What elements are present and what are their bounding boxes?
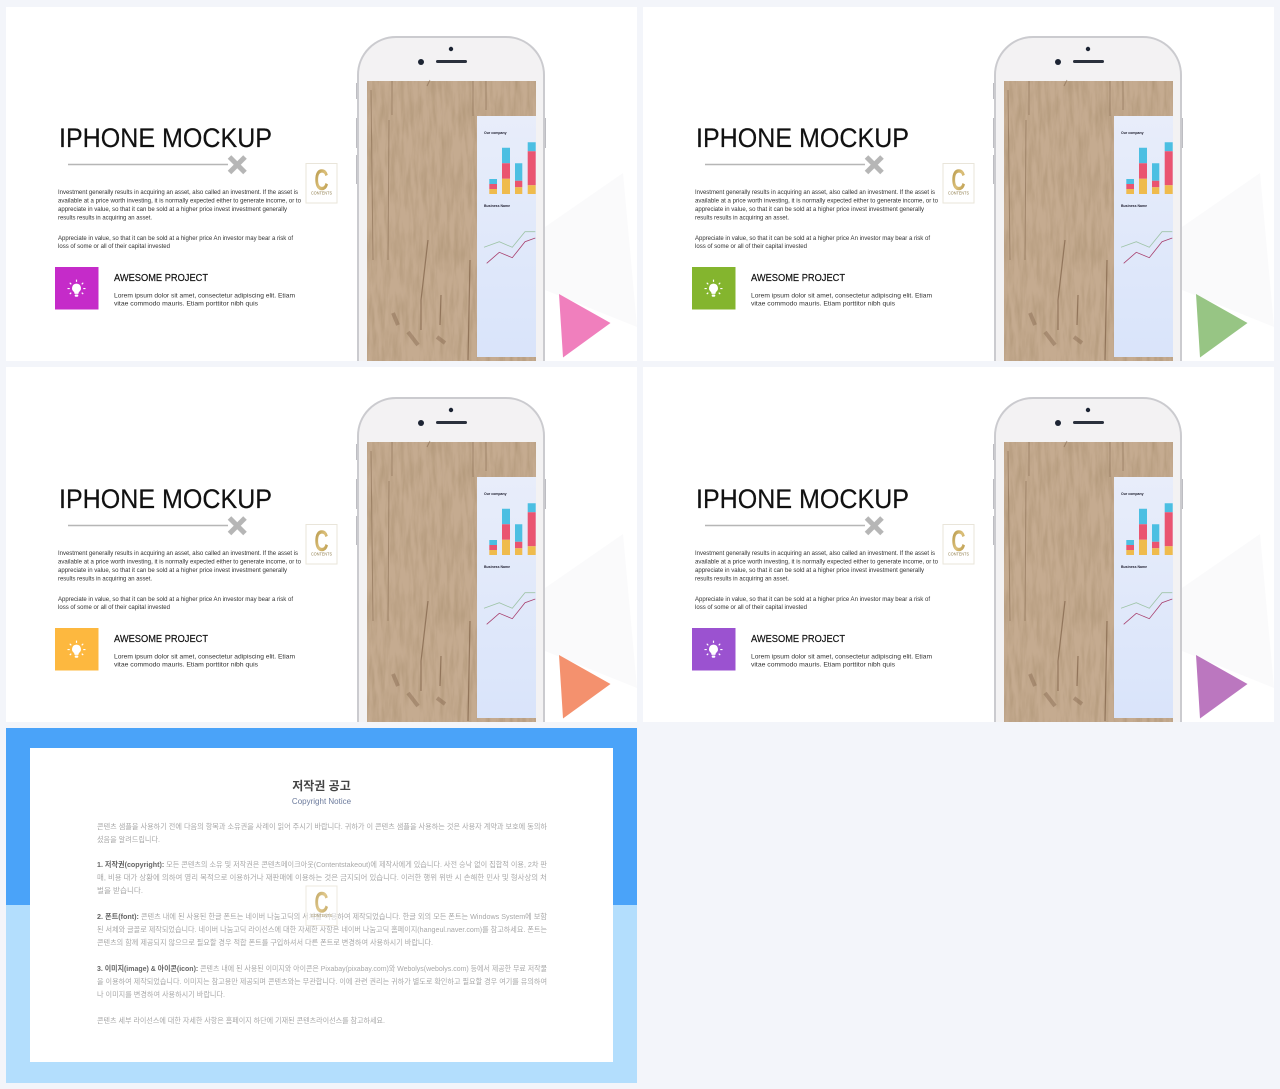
icon: light bulb tile <box>692 628 736 670</box>
project description: vitae commodo mauris. Etiam porttitor nibh quis <box>751 662 895 668</box>
project description: vitae commodo mauris. Etiam porttitor nibh quis <box>114 300 258 308</box>
title: IPHONE MOCKUP <box>696 484 909 514</box>
body paragraphs: Appreciate in value, so that it can be sold at a higher price An investor may bear a risk of <box>695 235 930 242</box>
section 3: image and icon: 3. 이미지(image) & 아이콘(icon): 콘텐츠 내에 된 사용된 이미지와 아이콘은 Pixabay(pixabay.com)와 Webolys(webolys.com) 등에서 제공한 무료 저작물 <box>97 963 547 973</box>
logo badge: C <box>952 525 966 558</box>
body paragraphs <box>695 550 939 611</box>
document with charts: Business Name <box>1121 565 1147 569</box>
logo badge: C <box>952 164 966 197</box>
logo badge: C <box>314 525 328 558</box>
body paragraphs: appreciate in value, so that it can be sold at a higher price invest investment generally <box>58 567 288 574</box>
title: IPHONE MOCKUP <box>59 123 272 153</box>
pale background triangle <box>1182 534 1274 688</box>
title rule with cross <box>68 157 245 172</box>
slide 1: magenta <box>6 7 637 370</box>
section 1: copyright <box>97 859 547 895</box>
project description: vitae commodo mauris. Etiam porttitor nibh quis <box>751 300 895 308</box>
body paragraphs: Investment generally results in acquiring an asset, also called an investment. If the asset is <box>58 550 298 557</box>
body paragraphs: loss of some or all of their capital invested <box>58 243 171 250</box>
body paragraphs: results results in acquiring an asset. <box>695 576 789 582</box>
document with charts: Business Name <box>484 565 510 569</box>
document with charts <box>477 477 536 718</box>
body paragraphs: available at a price worth investing, it is normally expected either to generate income, or to <box>695 558 939 566</box>
title rule with cross <box>705 518 882 534</box>
phone mockup <box>993 398 1183 731</box>
body paragraphs: appreciate in value, so that it can be sold at a higher price invest investment generally <box>695 567 925 574</box>
title: IPHONE MOCKUP <box>696 123 909 153</box>
document with charts <box>1114 477 1173 718</box>
project heading: AWESOME PROJECT <box>751 272 846 284</box>
body paragraphs: Appreciate in value, so that it can be sold at a higher price An investor may bear a risk of <box>695 596 930 603</box>
phone screen: wood <box>1004 441 1173 727</box>
project description <box>751 654 932 668</box>
logo badge: C <box>314 164 328 197</box>
body paragraphs: Appreciate in value, so that it can be sold at a higher price An investor may bear a risk of <box>58 235 293 242</box>
body paragraphs: loss of some or all of their capital invested <box>58 604 171 611</box>
document with charts: Our company <box>1121 131 1144 135</box>
document with charts: Our company <box>1121 492 1144 496</box>
document with charts <box>1114 116 1173 357</box>
slide background <box>6 7 637 361</box>
document with charts: Our company <box>484 492 507 496</box>
body paragraphs <box>695 189 939 250</box>
project heading: AWESOME PROJECT <box>114 272 209 284</box>
icon: light bulb tile <box>692 267 736 310</box>
pale background triangle <box>545 534 637 688</box>
slide 3: amber <box>6 367 637 731</box>
project description <box>114 292 295 308</box>
document with charts: Business Name <box>1121 204 1147 208</box>
body paragraphs <box>58 550 302 611</box>
logo badge: CONTENTS <box>948 190 969 196</box>
logo badge <box>943 524 974 564</box>
body paragraphs: appreciate in value, so that it can be sold at a higher price invest investment generally <box>58 206 288 213</box>
intro paragraph <box>97 821 547 844</box>
document with charts <box>477 116 536 357</box>
project description: Lorem ipsum dolor sit amet, consectetur adipiscing elit. Etiam <box>751 292 932 300</box>
title rule with cross <box>68 518 245 534</box>
icon: light bulb tile <box>55 628 98 670</box>
slide background <box>643 7 1274 361</box>
logo badge <box>306 524 337 564</box>
project description <box>114 654 295 668</box>
document with charts: Business Name <box>484 204 510 208</box>
copyright notice slide <box>6 728 637 1083</box>
phone mockup <box>993 37 1183 370</box>
document with charts: Our company <box>484 131 507 135</box>
logo badge: CONTENTS <box>311 190 332 196</box>
section 1: copyright: 매, 비용 대가 상황에 의하여 영리 목적으로 이용하거나 재판매에 이용하는 것은 금지되어 있습니다. 이러한 행위 위반 시 손해한 민사 및 형사상의 처 <box>97 872 547 882</box>
project description: vitae commodo mauris. Etiam porttitor nibh quis <box>114 662 258 668</box>
body paragraphs: results results in acquiring an asset. <box>58 214 152 222</box>
body paragraphs: loss of some or all of their capital invested <box>695 243 808 250</box>
logo badge: C <box>314 886 328 920</box>
phone mockup <box>356 398 546 731</box>
body paragraphs: results results in acquiring an asset. <box>695 214 789 222</box>
logo badge <box>943 164 974 203</box>
body paragraphs: available at a price worth investing, it is normally expected either to generate income, or to <box>58 558 302 566</box>
pale background triangle <box>545 173 637 327</box>
icon: light bulb tile <box>55 267 98 310</box>
body paragraphs: appreciate in value, so that it can be sold at a higher price invest investment generally <box>695 206 925 213</box>
project heading: AWESOME PROJECT <box>114 633 209 645</box>
body paragraphs: Appreciate in value, so that it can be sold at a higher price An investor may bear a risk of <box>58 596 293 603</box>
notice title: 저작권 공고 <box>292 778 351 793</box>
body paragraphs: Investment generally results in acquiring an asset, also called an investment. If the asset is <box>58 189 298 196</box>
logo badge: CONTENTS <box>948 552 969 556</box>
body paragraphs: available at a price worth investing, it is normally expected either to generate income, or to <box>695 198 939 204</box>
slide background <box>6 367 637 722</box>
section 2: font: 2. 폰트(font): 콘텐츠 내에 된 사용된 한글 폰트는 네이버 나눔고딕의 서체를 이용하여 제작되었습니다. 한글 외의 모든 폰트는 Windows System에 보함 <box>97 911 547 921</box>
title: IPHONE MOCKUP <box>59 484 272 514</box>
closing line: 콘텐츠 세부 라이선스에 대한 자세한 사항은 홈페이지 하단에 기재된 콘텐츠라이선스를 참고하세요. <box>97 1015 385 1025</box>
project heading: AWESOME PROJECT <box>751 633 846 645</box>
section 1: copyright: 1. 저작권(copyright): 모든 콘텐츠의 소유 및 저작권은 콘텐츠메이크아웃(Contentstakeout)에 제작사에게 있습니다. 사전 승낙 없이 집합적 이용, 2차 판 <box>97 859 547 869</box>
logo badge <box>306 164 337 203</box>
logo badge <box>306 886 337 926</box>
section 2: font <box>97 911 547 947</box>
title rule with cross <box>705 157 882 172</box>
section 3: image and icon: 나 이미지를 변경하여 사용하시기 바랍니다. <box>97 989 225 999</box>
body paragraphs: results results in acquiring an asset. <box>58 576 152 582</box>
section 3: image and icon <box>97 963 547 999</box>
logo badge: CONTENTS <box>311 913 332 918</box>
body paragraphs: available at a price worth investing, it is normally expected either to generate income, or to <box>58 198 302 204</box>
slide background <box>643 367 1274 722</box>
intro paragraph: 콘텐츠 샘플을 사용하기 전에 다음의 항목과 소유권을 사례이 읽어 주시기 바랍니다. 귀하가 이 콘텐츠 샘플을 사용하는 것은 사용자 계약과 보호에 동의하 <box>97 821 547 831</box>
blue upper band <box>6 728 637 905</box>
project description <box>751 292 932 308</box>
body paragraphs: Investment generally results in acquiring an asset, also called an investment. If the asset is <box>695 189 935 196</box>
intro paragraph: 셨음을 알려드립니다. <box>97 834 160 844</box>
accent triangle <box>1196 655 1248 718</box>
pale background triangle <box>1182 173 1274 327</box>
project description: Lorem ipsum dolor sit amet, consectetur adipiscing elit. Etiam <box>751 654 932 660</box>
section 2: font: 된 서체와 글꼴로 제작되었습니다. 네이버 나눔고딕 라이선스에 대한 자세한 사항은 네이버 나눔고딕 홈페이지(hangeul.naver.com)를 참고하세요. 폰트는 <box>97 924 547 934</box>
slide 2: green <box>643 7 1274 370</box>
section 2: font: 콘텐츠의 함께 제공되지 않으므로 필요할 경우 적합 폰트를 구입하셔서 다른 폰트로 변경하여 사용하시기 바랍니다. <box>97 937 433 947</box>
phone screen: wood <box>367 441 536 727</box>
body paragraphs: Investment generally results in acquiring an asset, also called an investment. If the asset is <box>695 550 935 557</box>
phone screen: wood <box>1004 80 1173 366</box>
slide 4: violet <box>643 367 1274 731</box>
body paragraphs: loss of some or all of their capital invested <box>695 604 808 611</box>
light blue lower band <box>6 905 637 1083</box>
project description: Lorem ipsum dolor sit amet, consectetur adipiscing elit. Etiam <box>114 292 295 300</box>
notice subtitle: Copyright Notice <box>292 797 352 806</box>
section 1: copyright: 벌을 받습니다. <box>97 885 143 895</box>
accent triangle <box>559 655 610 718</box>
phone screen: wood <box>367 80 536 366</box>
accent triangle <box>559 294 610 358</box>
project description: Lorem ipsum dolor sit amet, consectetur adipiscing elit. Etiam <box>114 654 295 660</box>
body paragraphs <box>58 189 302 250</box>
white notice card <box>30 748 613 1062</box>
accent triangle <box>1196 294 1248 358</box>
phone mockup <box>356 37 546 370</box>
logo badge: CONTENTS <box>311 552 332 556</box>
section 3: image and icon: 을 이용하여 제작되었습니다. 이미지는 참고용만 제공되며 콘텐츠와는 무관합니다. 이에 관련 권리는 귀하가 별도로 확인하고 필요할 경우 여기를 유의하여 <box>97 976 547 986</box>
